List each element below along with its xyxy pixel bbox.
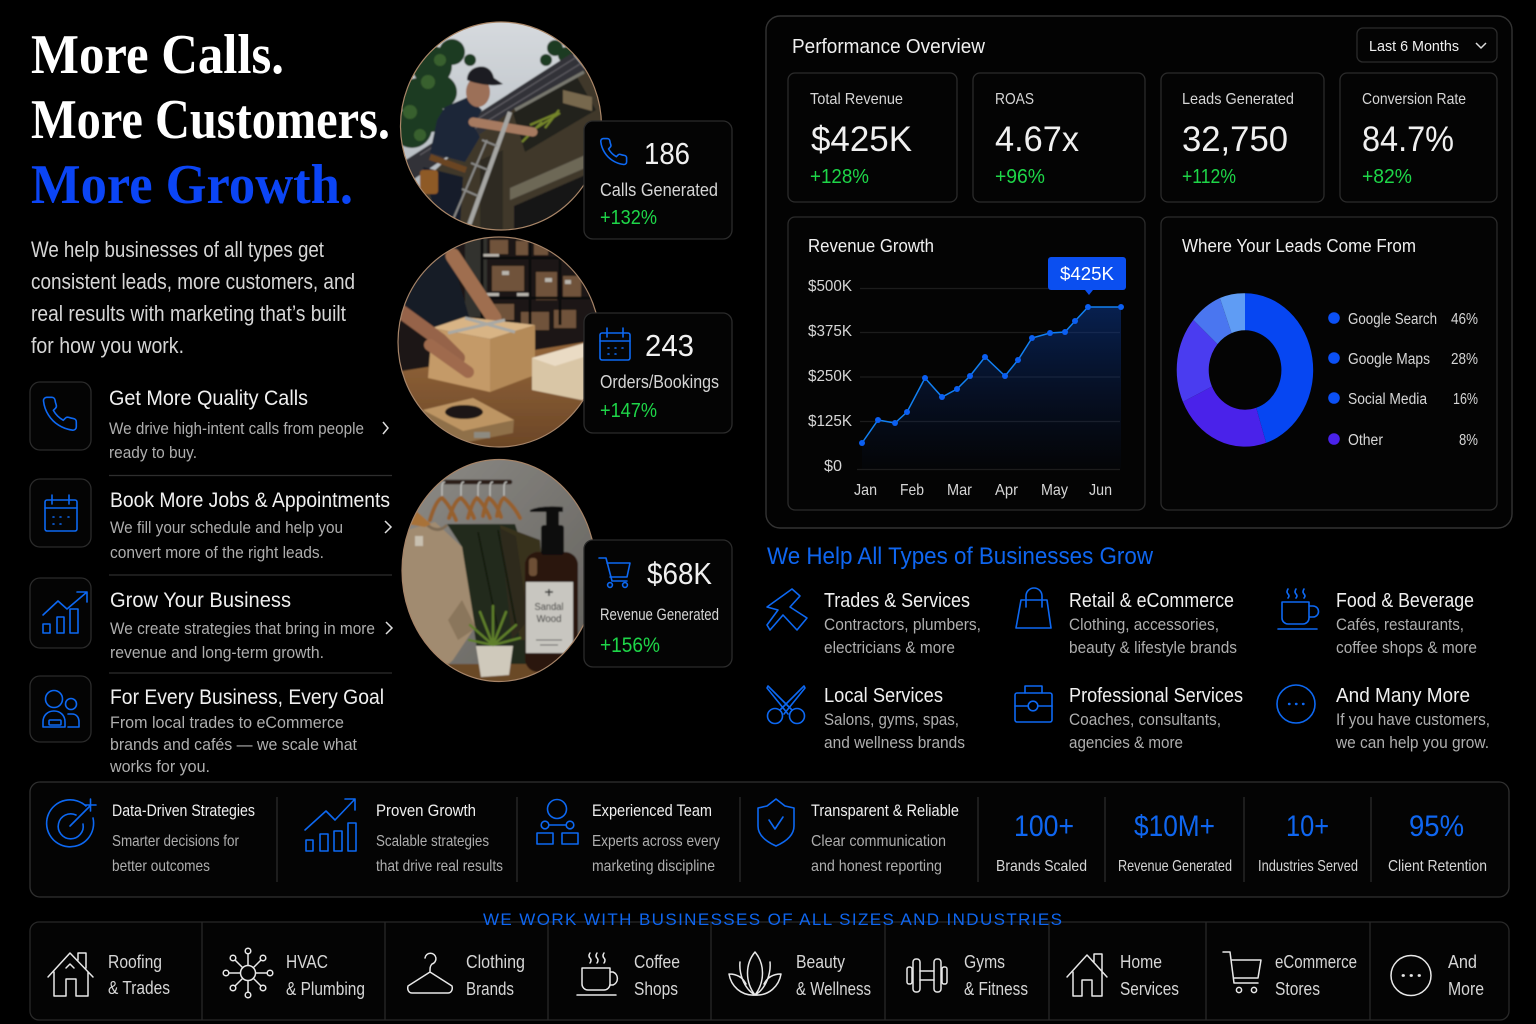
business: trades: electricians & more: [824, 639, 955, 657]
benefit: every business: [30, 676, 384, 776]
legend: Social Media: [1348, 391, 1427, 408]
stat card: calls: [584, 121, 732, 239]
chart: revenue growth: Mar: [947, 482, 973, 499]
icon: tools: [767, 589, 807, 630]
business: trades: [767, 589, 981, 657]
benefit: quality calls: ready to buy.: [109, 443, 197, 462]
industry: coffee: [577, 952, 680, 999]
benefit: every business: From local trades to eCommerce: [110, 713, 344, 732]
chart: revenue growth: Revenue Growth: [808, 236, 934, 256]
benefit: jobs and appointments: [30, 479, 391, 562]
intro paragraph: real results with marketing that’s built: [31, 301, 346, 326]
kpi: roas: 4.67x: [995, 120, 1079, 159]
industry: roofing: Roofing: [108, 952, 162, 972]
stat: industries served: [1258, 810, 1358, 875]
industry: home services: Home: [1120, 952, 1162, 972]
strategy: transparent: and honest reporting: [811, 858, 942, 875]
kpi: roas: [973, 73, 1145, 202]
icon: house: [48, 953, 93, 996]
icon: cart: [599, 558, 630, 587]
benefit: grow your business: [30, 578, 392, 662]
business: retail: Clothing, accessories,: [1069, 616, 1219, 634]
icon: growth chart: [30, 578, 91, 648]
stat card: revenue: +156%: [600, 634, 660, 657]
benefit: grow your business: We create strategies that bring in more: [110, 619, 375, 638]
business: food: Cafés, restaurants,: [1336, 616, 1464, 634]
business: food: coffee shops & more: [1336, 639, 1477, 657]
legend: 46%: [1451, 311, 1478, 328]
kpi: leads generated: +112%: [1182, 166, 1236, 188]
chart: revenue growth: Jun: [1089, 482, 1112, 499]
icon: cup: [577, 953, 617, 995]
business: local: Salons, gyms, spas,: [824, 711, 959, 729]
tooltip: [1048, 257, 1126, 295]
benefit: jobs and appointments: We fill your schedule and help you: [110, 518, 343, 537]
industry: coffee: Coffee: [634, 952, 680, 972]
business: retail: [1016, 588, 1237, 657]
strategy: proven growth: Scalable strategies: [376, 833, 489, 850]
benefit: jobs and appointments: Book More Jobs & Appointments: [110, 489, 390, 512]
business: food: Food & Beverage: [1336, 590, 1474, 612]
icon: dumbbell: [907, 959, 947, 992]
title: [31, 24, 390, 216]
kpi: conversion rate: [1340, 73, 1497, 202]
industry: hvac: & Plumbing: [286, 979, 365, 999]
business: professional: agencies & more: [1069, 734, 1183, 752]
stat: revenue generated: [1118, 810, 1232, 875]
industry: home services: [1067, 952, 1179, 999]
panel: performance overview: [766, 16, 1512, 528]
industry: beauty: Beauty: [796, 952, 845, 972]
photo: packing boxes: [396, 235, 606, 450]
chart: revenue growth: May: [1041, 482, 1068, 499]
stat card: revenue: Revenue Generated: [600, 605, 719, 624]
chart: revenue growth: $375K: [808, 323, 852, 340]
kpi: leads generated: 32,750: [1182, 120, 1288, 159]
stat: revenue generated: $10M+: [1134, 810, 1215, 843]
icon: phone: [601, 139, 627, 165]
industry: clothing: [408, 952, 525, 999]
chart: revenue growth: Apr: [995, 482, 1019, 499]
icon: scissors: [767, 686, 805, 724]
donut: [1177, 293, 1313, 447]
dropdown: [1357, 28, 1497, 62]
heading: Performance Overview: [792, 36, 986, 58]
chart: lead sources: Where Your Leads Come From: [1182, 236, 1416, 256]
photo: clothing and sandalwood bottle: [398, 456, 602, 684]
chart: revenue growth: $250K: [808, 368, 852, 385]
icon: ellipsis: [1391, 956, 1431, 996]
legend: Google Maps: [1348, 351, 1430, 368]
chart: revenue growth: $0: [824, 458, 842, 475]
icon: target: [47, 799, 96, 847]
benefit: every business: brands and cafés — we scale what: [110, 735, 357, 754]
intro paragraph: for how you work.: [31, 333, 184, 358]
icon: house: [1067, 954, 1107, 996]
tooltip: $425K: [1060, 264, 1114, 284]
stat card: revenue: $68K: [647, 556, 712, 591]
industry: roofing: [48, 952, 170, 998]
legend: Google Search: [1348, 311, 1437, 328]
stat: client retention: Client Retention: [1388, 858, 1487, 875]
benefit: grow your business: revenue and long-term growth.: [110, 643, 324, 662]
heading: business types: We Help All Types of Businesses Grow: [767, 543, 1154, 570]
intro paragraph: [31, 237, 355, 358]
business: food: [1278, 589, 1477, 657]
icon: phone: [30, 382, 91, 450]
strategy: data-driven: Smarter decisions for: [112, 833, 240, 850]
kpi: roas: +96%: [995, 166, 1045, 188]
stat card: calls: 186: [644, 136, 690, 171]
industry: coffee: Shops: [634, 979, 678, 999]
industry: and more: [1391, 952, 1484, 999]
business: trades: Contractors, plumbers,: [824, 616, 981, 634]
industry: and more: More: [1448, 979, 1484, 999]
icon: calendar: [30, 479, 91, 547]
stat card: calls: Calls Generated: [600, 180, 718, 200]
chart: revenue growth: Jan: [854, 482, 877, 499]
stat: brands scaled: 100+: [1014, 810, 1074, 843]
stat: revenue generated: Revenue Generated: [1118, 858, 1232, 875]
strategy: proven growth: [305, 799, 503, 875]
benefit: every business: works for you.: [109, 757, 210, 776]
kpi: total revenue: $425K: [811, 120, 912, 159]
strategy: data-driven: better outcomes: [112, 858, 210, 875]
business: trades: Trades & Services: [824, 590, 970, 612]
business: professional: [1015, 685, 1243, 752]
legend: 28%: [1451, 351, 1478, 368]
strategy: data-driven: Data-Driven Strategies: [112, 801, 255, 820]
stat: client retention: [1388, 810, 1487, 875]
business: many more: And Many More: [1336, 685, 1470, 707]
intro paragraph: consistent leads, more customers, and: [31, 269, 355, 294]
icon: ellipsis: [1277, 685, 1315, 723]
kpi: conversion rate: 84.7%: [1362, 120, 1454, 159]
industry: hvac: HVAC: [286, 952, 328, 972]
title: More Customers.: [31, 89, 390, 151]
stat card: orders: Orders/Bookings: [600, 372, 719, 392]
icon: bag: [1016, 588, 1051, 628]
chart: lead sources: [1161, 217, 1497, 510]
kpi: total revenue: [788, 73, 957, 202]
photo: clothing and sandalwood bottle: Sandal: [534, 601, 564, 613]
industry: home services: Services: [1120, 979, 1179, 999]
chart: revenue growth: $500K: [808, 278, 852, 295]
icon: calendar: [600, 328, 630, 360]
benefit: every business: For Every Business, Every Goal: [110, 686, 384, 709]
business: professional: Professional Services: [1069, 685, 1243, 707]
stat card: orders: 243: [645, 328, 694, 363]
strategy: transparent: Clear communication: [811, 833, 946, 850]
business: many more: [1277, 685, 1490, 752]
icon: hanger: [408, 953, 452, 993]
kpi: conversion rate: Conversion Rate: [1362, 91, 1466, 108]
stat: brands scaled: Brands Scaled: [996, 858, 1087, 875]
business: local: [767, 685, 965, 752]
industry: gyms: [907, 952, 1028, 999]
business: many more: we can help you grow.: [1335, 734, 1489, 752]
chart: revenue growth: $125K: [808, 413, 852, 430]
photo: clothing and sandalwood bottle: Wood: [536, 613, 562, 625]
benefit: grow your business: Grow Your Business: [110, 589, 291, 612]
industry: and more: And: [1448, 952, 1477, 972]
benefit: quality calls: [30, 382, 388, 462]
kpi: total revenue: Total Revenue: [810, 91, 903, 108]
stat card: calls: +132%: [600, 207, 657, 229]
icon: team: [537, 800, 578, 844]
industry: beauty: & Wellness: [796, 979, 871, 999]
industry: beauty: [729, 952, 871, 999]
stat card: orders: [584, 313, 732, 433]
legend: Other: [1348, 432, 1383, 449]
industry: ecommerce: [1223, 952, 1357, 999]
business: retail: Retail & eCommerce: [1069, 590, 1234, 612]
panel: industries row: [30, 910, 1509, 1020]
strategy: experienced team: Experts across every: [592, 833, 720, 850]
business: local: Local Services: [824, 685, 943, 707]
dropdown: Last 6 Months: [1369, 38, 1459, 55]
industry: roofing: & Trades: [108, 978, 170, 998]
strategy: experienced team: Experienced Team: [592, 801, 712, 820]
icon: briefcase: [1015, 686, 1052, 722]
title: More Calls.: [31, 24, 284, 86]
kpi: leads generated: [1161, 73, 1324, 202]
chart: revenue growth: [788, 217, 1145, 510]
icon: network: [223, 948, 273, 998]
photo: roofer on ladder: [392, 20, 610, 235]
industry: ecommerce: Stores: [1275, 979, 1320, 999]
industry: clothing: Brands: [466, 979, 514, 999]
industries heading: WE WORK WITH BUSINESSES OF ALL SIZES AND INDUSTRIES: [483, 910, 1062, 929]
benefit: jobs and appointments: convert more of the right leads.: [110, 543, 324, 562]
kpi: conversion rate: +82%: [1362, 166, 1412, 188]
kpi: leads generated: Leads Generated: [1182, 91, 1294, 108]
benefit: quality calls: We drive high-intent calls from people: [109, 419, 364, 438]
business: many more: If you have customers,: [1336, 711, 1490, 729]
intro paragraph: We help businesses of all types get: [31, 237, 324, 262]
benefit: quality calls: Get More Quality Calls: [109, 387, 308, 410]
business: local: and wellness brands: [824, 734, 965, 752]
industry: gyms: & Fitness: [964, 979, 1028, 999]
industry: ecommerce: eCommerce: [1275, 952, 1357, 972]
strategy: proven growth: that drive real results: [376, 858, 503, 875]
kpi: total revenue: +128%: [810, 166, 869, 188]
panel: why us strip: [30, 782, 1509, 897]
chart: revenue growth: Feb: [900, 482, 924, 499]
strategy: transparent: [758, 799, 959, 875]
icon: coffee: [1278, 589, 1318, 629]
stat: client retention: 95%: [1409, 810, 1464, 843]
icon: shield: [758, 799, 794, 846]
legend: 16%: [1453, 391, 1478, 408]
stat: brands scaled: [996, 810, 1087, 875]
title: More Growth.: [31, 154, 353, 216]
icon: growth bars: [305, 799, 356, 851]
stat card: revenue: [584, 540, 732, 667]
strategy: experienced team: marketing discipline: [592, 858, 715, 875]
business: retail: beauty & lifestyle brands: [1069, 639, 1237, 657]
stat: industries served: 10+: [1286, 810, 1329, 843]
business: professional: Coaches, consultants,: [1069, 711, 1221, 729]
stat card: orders: +147%: [600, 400, 657, 422]
strategy: experienced team: [537, 800, 720, 875]
stat: industries served: Industries Served: [1258, 858, 1358, 875]
industry: gyms: Gyms: [964, 952, 1005, 972]
kpi: roas: ROAS: [995, 91, 1034, 108]
icon: people: [30, 676, 91, 742]
industry: hvac: [223, 948, 365, 999]
strategy: proven growth: Proven Growth: [376, 801, 476, 820]
icon: cart: [1223, 952, 1261, 993]
legend: 8%: [1459, 432, 1478, 449]
icon: lotus: [729, 952, 781, 995]
legend: [1328, 311, 1478, 449]
strategy: data-driven: [47, 799, 255, 875]
industry: clothing: Clothing: [466, 952, 525, 972]
strategy: transparent: Transparent & Reliable: [811, 801, 959, 820]
